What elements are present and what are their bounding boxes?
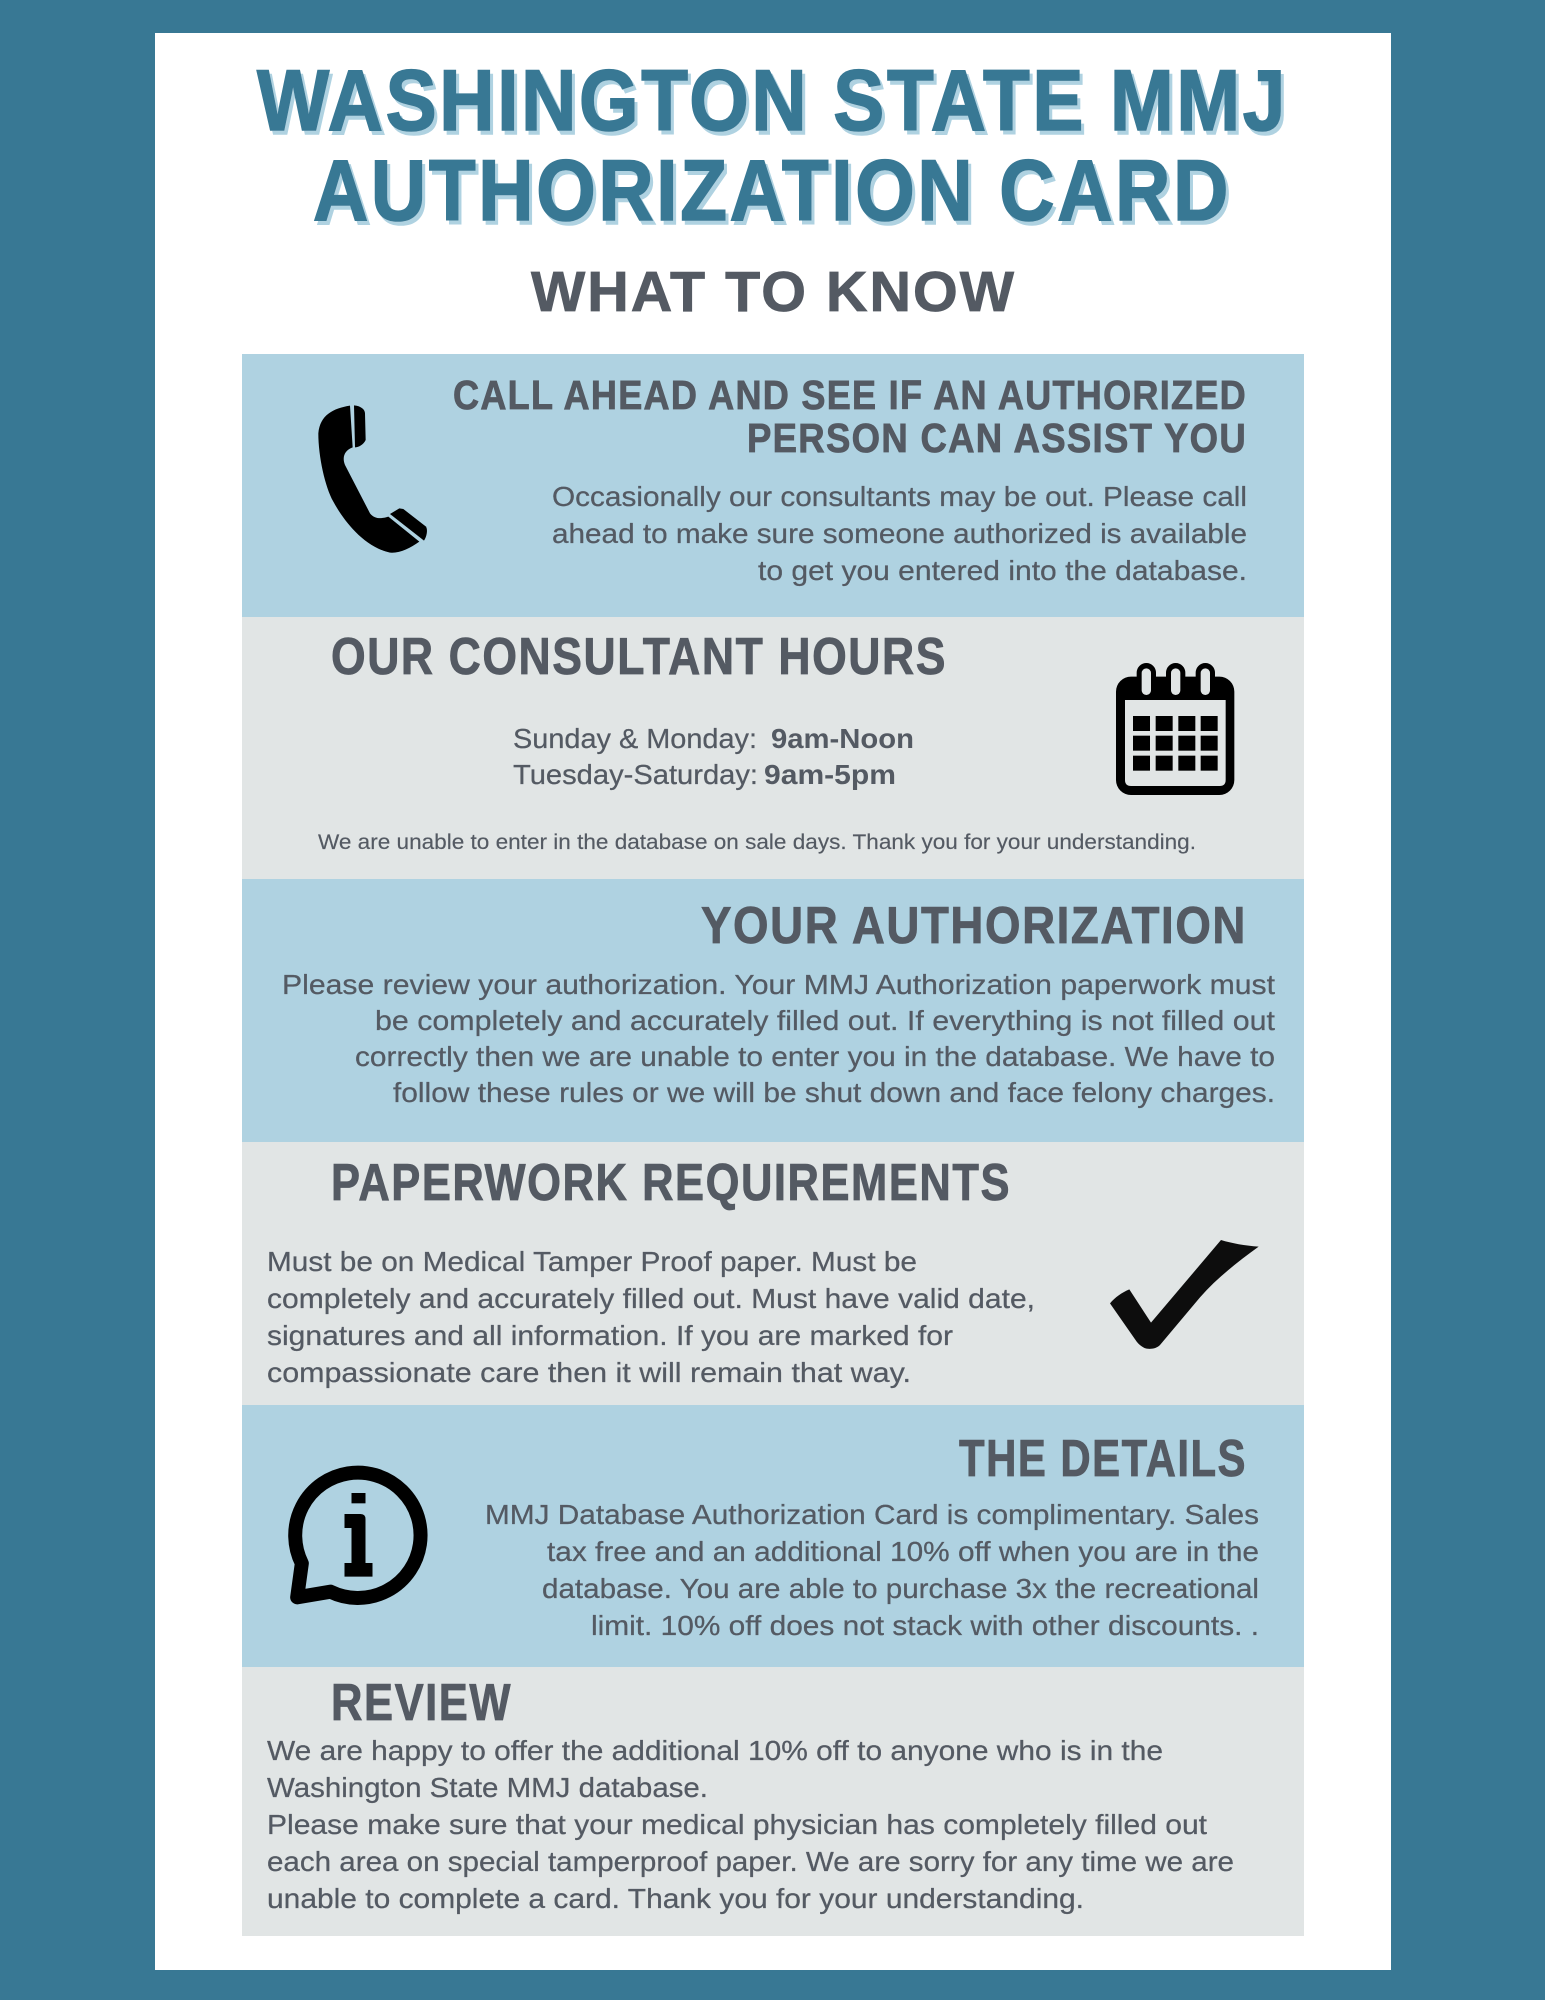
text: paperwork body: completely and accurately filled out. Must have valid date, — [267, 1283, 1035, 1314]
text: authorization body: Please review your authorization. Your MMJ Authorization paperwork must — [282, 969, 1275, 1000]
text: authorization body — [282, 969, 1275, 1108]
text: authorization body: be completely and accurately filled out. If everything is not filled out — [375, 1005, 1275, 1036]
text: review body: Washington State MMJ database. — [267, 1772, 708, 1803]
heading: paperwork requirements: PAPERWORK REQUIREMENTS — [331, 1154, 1011, 1212]
heading: the details: THE DETAILS — [959, 1430, 1247, 1488]
text: paperwork body: Must be on Medical Tamper Proof paper. Must be — [267, 1246, 917, 1277]
text: details body: database. You are able to purchase 3x the recreational — [542, 1573, 1259, 1604]
panel: consultant hours — [242, 617, 1304, 879]
heading: review: REVIEW — [331, 1674, 512, 1732]
panel: the details — [242, 1405, 1304, 1667]
text: review body: unable to complete a card. Thank you for your understanding. — [267, 1883, 1084, 1914]
text: call ahead body: to get you entered into the database. — [758, 555, 1247, 586]
text: authorization body: follow these rules or we will be shut down and face felony charges. — [393, 1077, 1275, 1108]
heading: your authorization: YOUR AUTHORIZATION — [701, 897, 1247, 955]
text: sale days note: We are unable to enter in the database on sale days. Thank you for your understanding. — [318, 831, 1196, 854]
text: paperwork body: compassionate care then it will remain that way. — [267, 1357, 911, 1388]
text: review body — [267, 1735, 1234, 1914]
text: hours: 9am-5pm — [764, 759, 896, 790]
text: call ahead body: Occasionally our consultants may be out. Please call — [552, 481, 1247, 512]
text: details body — [485, 1499, 1259, 1641]
panel: paperwork requirements — [242, 1142, 1304, 1405]
heading: call ahead — [453, 372, 1247, 461]
text: review body: Please make sure that your medical physician has completely filled out — [267, 1809, 1207, 1840]
text: call ahead body — [552, 481, 1247, 586]
text: paperwork body: signatures and all information. If you are marked for — [267, 1320, 953, 1351]
icon: calendar — [1116, 663, 1234, 795]
text: call ahead body: ahead to make sure someone authorized is available — [552, 518, 1247, 549]
heading: call ahead: CALL AHEAD AND SEE IF AN AUTHORIZED — [453, 372, 1247, 418]
panel: your authorization — [242, 879, 1304, 1142]
icon: telephone handset — [318, 405, 427, 553]
title — [257, 53, 1288, 239]
panel: call ahead — [242, 354, 1304, 617]
title: WASHINGTON STATE MMJ — [257, 53, 1288, 149]
title: AUTHORIZATION CARD — [313, 143, 1231, 239]
text: paperwork body — [267, 1246, 1035, 1388]
text: hours: 9am-Noon — [771, 723, 914, 754]
text: hours — [513, 723, 914, 790]
icon: info speech bubble — [295, 1473, 421, 1598]
panel: review — [242, 1667, 1304, 1936]
text: details body: tax free and an additional 10% off when you are in the — [547, 1536, 1259, 1567]
text: review body: each area on special tamperproof paper. We are sorry for any time we are — [267, 1846, 1234, 1877]
text: review body: We are happy to offer the additional 10% off to anyone who is in the — [267, 1735, 1163, 1766]
text: authorization body: correctly then we are unable to enter you in the database. We have to — [355, 1041, 1275, 1072]
heading: consultant hours: OUR CONSULTANT HOURS — [331, 628, 947, 686]
text: hours: Sunday & Monday: — [513, 723, 757, 754]
text: details body: limit. 10% off does not stack with other discounts. . — [591, 1610, 1259, 1641]
icon: check mark — [1110, 1240, 1259, 1349]
subtitle: WHAT TO KNOW — [531, 260, 1016, 324]
text: details body: MMJ Database Authorization Card is complimentary. Sales — [485, 1499, 1259, 1530]
heading: call ahead: PERSON CAN ASSIST YOU — [747, 415, 1247, 461]
text: hours: Tuesday-Saturday: — [513, 759, 758, 790]
white card — [155, 33, 1391, 1970]
